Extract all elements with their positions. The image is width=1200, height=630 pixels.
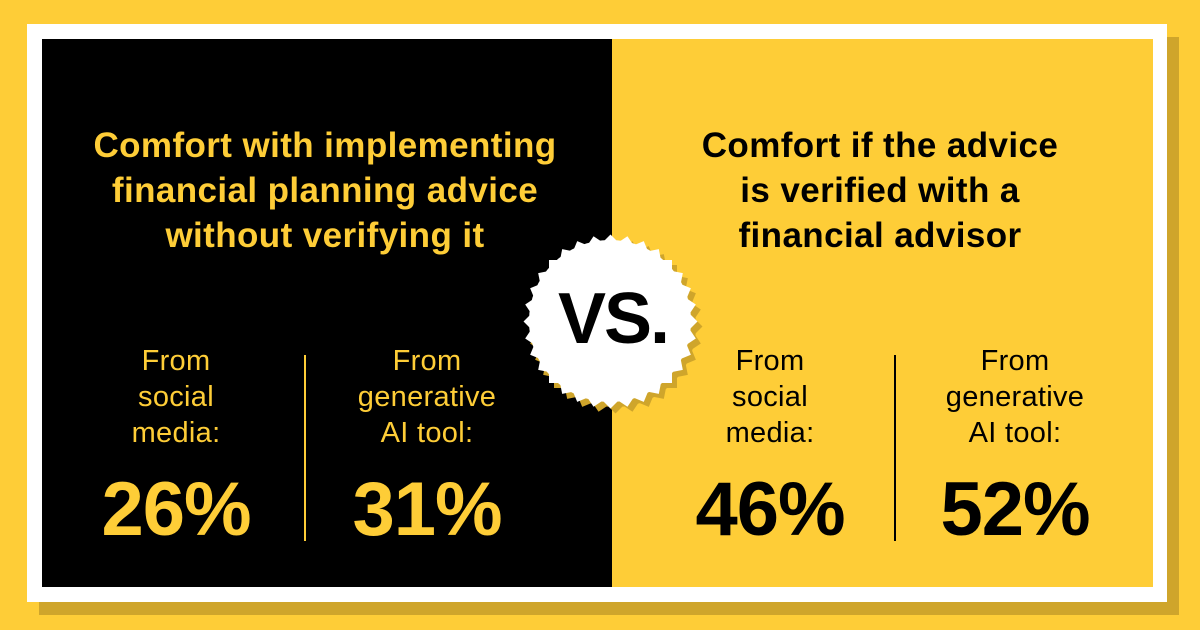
label: generative AI: AI tool:	[381, 417, 473, 449]
heading right: financial advisor	[738, 216, 1022, 255]
heading right: Comfort if the advice	[702, 126, 1058, 165]
number 52%: 52%	[940, 467, 1090, 552]
label: social media right: media:	[726, 417, 814, 449]
number 31%: 31%	[352, 467, 502, 552]
panel: left black	[42, 39, 612, 587]
heading left: financial planning advice	[112, 171, 538, 210]
label: generative AI right	[946, 345, 1084, 449]
label: social media: social	[138, 381, 214, 413]
label: generative AI right: generative	[946, 381, 1084, 413]
heading left	[93, 126, 557, 255]
number 26%: 26%	[101, 467, 251, 552]
label: social media	[132, 345, 220, 449]
label: social media right	[726, 345, 814, 449]
label: generative AI: From	[393, 345, 461, 377]
badge shadow	[528, 240, 702, 414]
label: social media right: From	[736, 345, 804, 377]
label: generative AI	[358, 345, 496, 449]
number 46%: 46%	[695, 467, 845, 552]
label: social media: media:	[132, 417, 220, 449]
label: generative AI right: From	[981, 345, 1049, 377]
badge: VS.	[524, 234, 698, 408]
heading left: Comfort with implementing	[93, 126, 557, 165]
badge: VS.: VS.	[558, 279, 668, 359]
label: social media: From	[142, 345, 210, 377]
label: social media right: social	[732, 381, 808, 413]
heading right	[702, 126, 1058, 255]
heading left: without verifying it	[165, 216, 485, 255]
label: generative AI: generative	[358, 381, 496, 413]
label: generative AI right: AI tool:	[969, 417, 1061, 449]
panel: right yellow	[612, 39, 1153, 587]
heading right: is verified with a	[740, 171, 1020, 210]
